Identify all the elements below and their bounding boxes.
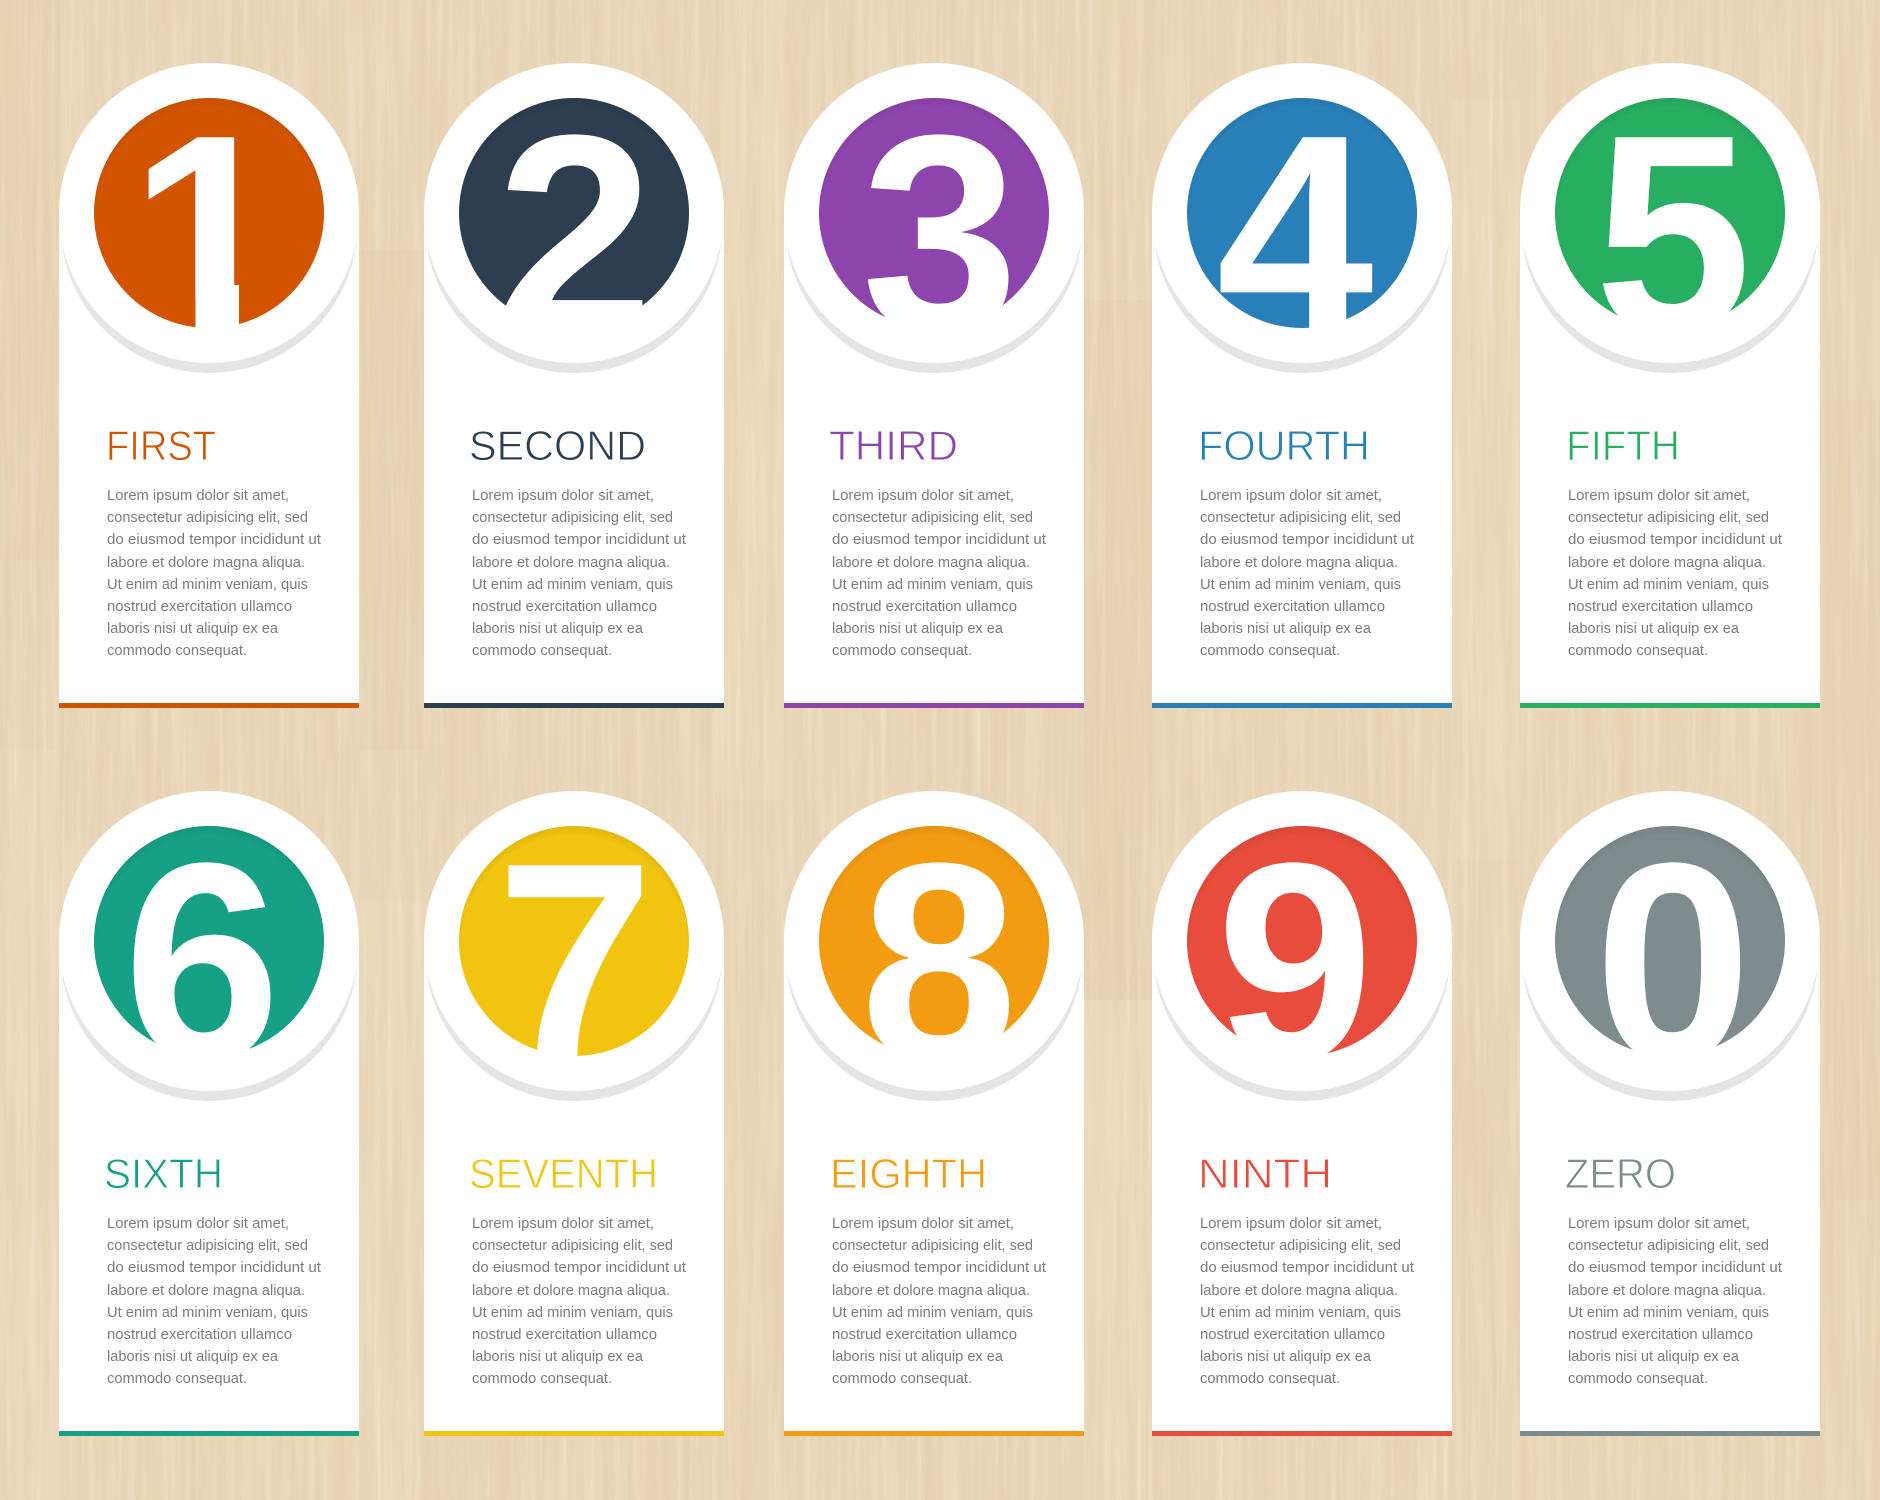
number badge 0: 0 [1594,804,1752,1120]
number badge 9: 9 [1216,804,1374,1120]
body text: do eiusmod tempor incididunt ut [472,1260,686,1276]
number badge 4 [1187,76,1417,392]
body text: Lorem ipsum dolor sit amet, [1200,488,1382,504]
number badge 3 [819,76,1049,392]
body text [472,1216,686,1387]
body text: laboris nisi ut aliquip ex ea [1200,621,1372,637]
body text: labore et dolore magna aliqua. [1200,555,1398,571]
body text: Lorem ipsum dolor sit amet, [1200,1216,1382,1232]
card 9: ninth [1152,791,1452,1436]
body text: consectetur adipisicing elit, sed [1568,510,1769,526]
body text: consectetur adipisicing elit, sed [107,510,308,526]
number badge 2: 2 [496,76,654,392]
body text: Ut enim ad minim veniam, quis [832,577,1033,593]
body text: commodo consequat. [832,643,972,659]
number badge 3: 3 [861,76,1019,392]
body text: laboris nisi ut aliquip ex ea [1568,621,1740,637]
card 4: fourth [1152,63,1452,708]
heading: FIRST: FIRST [106,422,216,469]
body text: do eiusmod tempor incididunt ut [1568,1260,1782,1276]
body text: Lorem ipsum dolor sit amet, [472,1216,654,1232]
body text: nostrud exercitation ullamco [107,1327,292,1343]
body text: commodo consequat. [472,1371,612,1387]
body text: Lorem ipsum dolor sit amet, [107,488,289,504]
body text: Ut enim ad minim veniam, quis [1200,1305,1401,1321]
body text: commodo consequat. [832,1371,972,1387]
body text: Lorem ipsum dolor sit amet, [472,488,654,504]
body text: laboris nisi ut aliquip ex ea [107,1349,279,1365]
body text: nostrud exercitation ullamco [832,599,1017,615]
body text: Ut enim ad minim veniam, quis [1568,577,1769,593]
body text: Ut enim ad minim veniam, quis [1200,577,1401,593]
body text: commodo consequat. [107,1371,247,1387]
body text: do eiusmod tempor incididunt ut [107,532,321,548]
body text: nostrud exercitation ullamco [472,599,657,615]
body text [832,1216,1046,1387]
body text: Ut enim ad minim veniam, quis [832,1305,1033,1321]
body text: do eiusmod tempor incididunt ut [472,532,686,548]
body text: labore et dolore magna aliqua. [472,555,670,571]
body text: consectetur adipisicing elit, sed [472,510,673,526]
body text: laboris nisi ut aliquip ex ea [832,1349,1004,1365]
card 6: sixth [59,791,359,1436]
card 7: seventh [424,791,724,1436]
body text: Lorem ipsum dolor sit amet, [832,1216,1014,1232]
body text: nostrud exercitation ullamco [1568,599,1753,615]
body text: consectetur adipisicing elit, sed [1568,1238,1769,1254]
heading: NINTH: NINTH [1198,1150,1332,1197]
body text: labore et dolore magna aliqua. [107,1283,305,1299]
heading: SEVENTH: SEVENTH [469,1150,658,1197]
body text: Lorem ipsum dolor sit amet, [832,488,1014,504]
body text: consectetur adipisicing elit, sed [107,1238,308,1254]
body text: commodo consequat. [1200,643,1340,659]
body text [832,488,1046,659]
card 5: fifth [1520,63,1820,708]
number badge 0 [1555,804,1785,1120]
body text: consectetur adipisicing elit, sed [832,510,1033,526]
body text: nostrud exercitation ullamco [1568,1327,1753,1343]
heading: FOURTH: FOURTH [1198,422,1370,469]
body text: do eiusmod tempor incididunt ut [832,532,1046,548]
number badge 5: 5 [1594,76,1752,392]
body text: consectetur adipisicing elit, sed [472,1238,673,1254]
body text [1200,488,1414,659]
card 10: zero [1520,791,1820,1436]
body text: Ut enim ad minim veniam, quis [107,1305,308,1321]
body text: labore et dolore magna aliqua. [1568,1283,1766,1299]
body text: Ut enim ad minim veniam, quis [107,577,308,593]
body text [107,488,321,659]
heading: SECOND: SECOND [469,422,646,469]
body text: consectetur adipisicing elit, sed [1200,510,1401,526]
number badge 1 [94,98,324,328]
body text [1568,1216,1782,1387]
body text [1200,1216,1414,1387]
number badge 9 [1187,804,1417,1120]
body text: Lorem ipsum dolor sit amet, [107,1216,289,1232]
body text: nostrud exercitation ullamco [107,599,292,615]
body text: Ut enim ad minim veniam, quis [1568,1305,1769,1321]
number badge 6: 6 [123,804,281,1120]
body text: do eiusmod tempor incididunt ut [1568,532,1782,548]
heading: FIFTH: FIFTH [1566,422,1680,469]
body text: commodo consequat. [1568,643,1708,659]
body text: labore et dolore magna aliqua. [1568,555,1766,571]
body text: Lorem ipsum dolor sit amet, [1568,488,1750,504]
body text: laboris nisi ut aliquip ex ea [832,621,1004,637]
body text [1568,488,1782,659]
body text: labore et dolore magna aliqua. [832,1283,1030,1299]
body text: do eiusmod tempor incididunt ut [1200,1260,1414,1276]
body text: nostrud exercitation ullamco [1200,599,1385,615]
body text: Ut enim ad minim veniam, quis [472,577,673,593]
body text: commodo consequat. [1200,1371,1340,1387]
body text: laboris nisi ut aliquip ex ea [1568,1349,1740,1365]
body text: Lorem ipsum dolor sit amet, [1568,1216,1750,1232]
heading: THIRD: THIRD [829,422,958,469]
number badge 5 [1555,76,1785,392]
body text: do eiusmod tempor incididunt ut [107,1260,321,1276]
body text: laboris nisi ut aliquip ex ea [1200,1349,1372,1365]
body text: nostrud exercitation ullamco [472,1327,657,1343]
card 3: third [784,63,1084,708]
body text: laboris nisi ut aliquip ex ea [472,1349,644,1365]
number badge 6 [94,804,324,1120]
body text [472,488,686,659]
body text: nostrud exercitation ullamco [832,1327,1017,1343]
card 2: second [424,63,724,708]
body text: labore et dolore magna aliqua. [107,555,305,571]
body text: consectetur adipisicing elit, sed [832,1238,1033,1254]
card 8: eighth [784,791,1084,1436]
body text: labore et dolore magna aliqua. [472,1283,670,1299]
number badge 8 [819,804,1049,1120]
body text: laboris nisi ut aliquip ex ea [472,621,644,637]
heading: ZERO: ZERO [1565,1150,1676,1197]
card 1: first [59,63,359,708]
number badge 8: 8 [860,804,1018,1120]
body text: nostrud exercitation ullamco [1200,1327,1385,1343]
heading: EIGHTH: EIGHTH [830,1150,987,1197]
number badge 7: 7 [496,804,654,1120]
number badge 1: 1 [129,76,287,392]
body text: labore et dolore magna aliqua. [832,555,1030,571]
number badge 4: 4 [1216,76,1375,392]
body text: laboris nisi ut aliquip ex ea [107,621,279,637]
number badge 7 [459,804,689,1120]
body text: labore et dolore magna aliqua. [1200,1283,1398,1299]
body text [107,1216,321,1387]
body text: commodo consequat. [472,643,612,659]
heading: SIXTH: SIXTH [104,1150,223,1197]
body text: consectetur adipisicing elit, sed [1200,1238,1401,1254]
body text: Ut enim ad minim veniam, quis [472,1305,673,1321]
number badge 2 [459,76,689,392]
body text: do eiusmod tempor incididunt ut [1200,532,1414,548]
body text: do eiusmod tempor incididunt ut [832,1260,1046,1276]
body text: commodo consequat. [1568,1371,1708,1387]
body text: commodo consequat. [107,643,247,659]
